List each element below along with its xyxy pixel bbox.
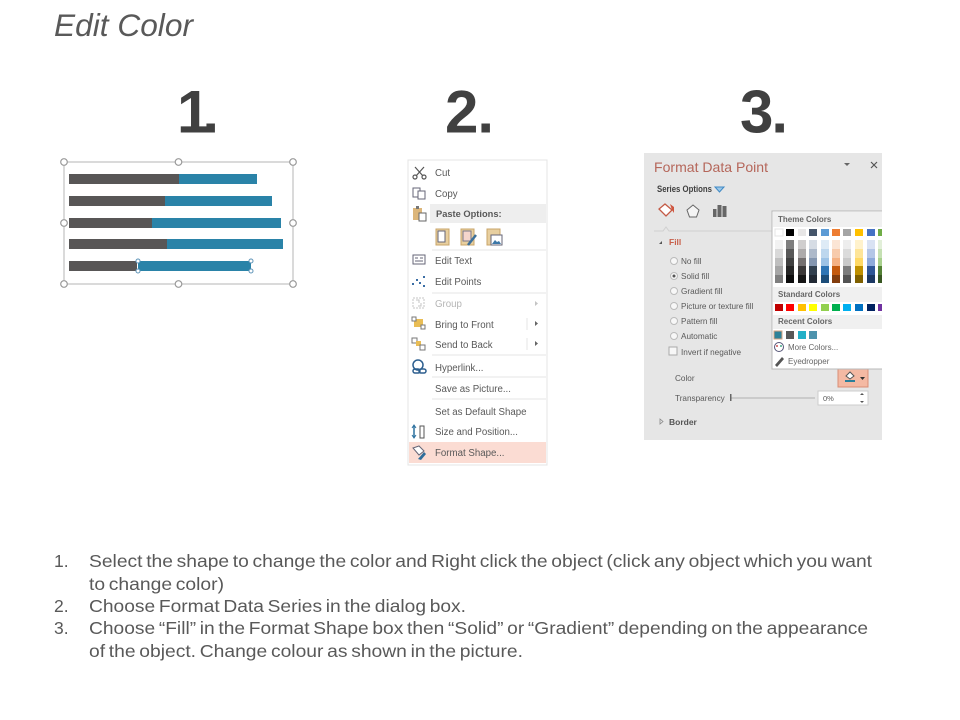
step 3 text xyxy=(54,618,868,661)
icon: series options arrow xyxy=(715,187,724,192)
fill radio options: Color xyxy=(675,374,695,383)
icon: paste xyxy=(413,206,426,221)
menu labels: Format Shape... xyxy=(435,448,504,459)
icon: send to back xyxy=(412,338,425,350)
transparency slider xyxy=(730,391,868,405)
panel: context menu xyxy=(408,160,547,465)
fill radio options: Pattern fill xyxy=(681,317,718,326)
menu labels: Copy xyxy=(435,189,458,200)
step number 3: 3. xyxy=(740,78,788,146)
menu labels: Size and Position... xyxy=(435,427,518,438)
step 2 text: 2. xyxy=(54,596,69,616)
menu labels: Edit Points xyxy=(435,277,481,288)
menu labels: Set as Default Shape xyxy=(435,407,527,418)
step 1 text xyxy=(54,551,872,594)
pane controls xyxy=(844,163,850,166)
step 1 text: Select the shape to change the color and Right click the object (click any object which you want xyxy=(89,551,872,571)
menu labels: Send to Back xyxy=(435,340,493,351)
standard color row xyxy=(775,304,882,311)
menu labels xyxy=(435,168,527,459)
step 1 text: to change color) xyxy=(89,574,224,594)
fill radio options xyxy=(669,257,754,403)
icon: pentagon xyxy=(687,205,699,217)
menu background xyxy=(408,160,547,465)
menu labels: Bring to Front xyxy=(435,320,494,331)
panel: format data point pane xyxy=(644,153,882,440)
icon: size and position xyxy=(412,425,424,438)
menu labels: Cut xyxy=(435,168,450,179)
step 3 text: of the object. Change colour as shown in the picture. xyxy=(89,641,523,661)
step 2 text: Choose Format Data Series in the dialog box. xyxy=(89,596,466,616)
menu labels: Paste Options: xyxy=(436,209,502,219)
popup headings xyxy=(778,215,841,326)
icon: scissors xyxy=(413,167,426,179)
menu labels: Hyperlink... xyxy=(435,363,483,374)
more colors option: More Colors... xyxy=(788,343,838,352)
selection frame xyxy=(64,162,293,284)
popup headings: Theme Colors xyxy=(778,215,832,224)
title: Edit Color xyxy=(54,7,195,43)
tab divider xyxy=(654,227,773,231)
eyedropper option: Eyedropper xyxy=(788,357,830,366)
fill radio options: No fill xyxy=(681,257,702,266)
theme color shades xyxy=(775,240,882,283)
gray bars xyxy=(69,174,179,271)
pane heading: Format Data Point xyxy=(654,159,768,175)
step 3 text: Choose “Fill” in the Format Shape box then “Solid” or “Gradient” depending on the appearance xyxy=(89,618,868,638)
popup headings: Standard Colors xyxy=(778,290,841,299)
icon: bring to front xyxy=(412,317,425,329)
pane background xyxy=(644,153,882,440)
icon: edit points xyxy=(412,276,425,287)
series options label: Series Options xyxy=(657,184,712,194)
step number 1: 1. xyxy=(177,78,219,146)
icon: edit text xyxy=(413,255,425,264)
menu separators xyxy=(432,250,546,399)
icon: copy xyxy=(413,188,425,199)
fill section header xyxy=(659,237,681,247)
fill radio options: Gradient fill xyxy=(681,287,723,296)
paste options highlight xyxy=(430,204,546,223)
border section: Border xyxy=(669,417,698,427)
fill section header: Fill xyxy=(669,237,681,247)
theme color row xyxy=(775,229,882,236)
step number 2: 2. xyxy=(445,78,494,146)
popup background xyxy=(772,211,882,369)
eyedropper option xyxy=(775,357,830,367)
icon: paste options xyxy=(436,229,502,245)
icon: format shape xyxy=(413,446,426,460)
panel: color picker popup xyxy=(772,211,882,369)
fill radio options: Transparency xyxy=(675,394,726,403)
panel: selected bar chart xyxy=(61,159,296,287)
icon: group xyxy=(413,298,424,308)
fill radio options: Invert if negative xyxy=(681,348,742,357)
fill radio options: Picture or texture fill xyxy=(681,302,754,311)
transparency slider: 0% xyxy=(823,394,834,403)
icon: fill bucket xyxy=(659,204,674,216)
data point handles xyxy=(136,259,253,273)
format shape highlight xyxy=(409,442,546,463)
popup headings: Recent Colors xyxy=(778,317,833,326)
step 3 text: 3. xyxy=(54,618,69,638)
menu labels: Edit Text xyxy=(435,256,472,267)
fill radio options: Solid fill xyxy=(681,272,709,281)
popup header bands xyxy=(773,212,882,227)
recent color row xyxy=(774,331,817,339)
instructions list xyxy=(54,551,872,661)
frame handles xyxy=(61,159,296,287)
step 1 text: 1. xyxy=(54,551,69,571)
menu labels: Group xyxy=(435,299,462,310)
icon: hyperlink xyxy=(413,360,426,373)
fill radio options: Automatic xyxy=(681,332,717,341)
blue bars xyxy=(138,174,283,271)
menu labels: Save as Picture... xyxy=(435,384,511,395)
color button xyxy=(838,368,868,387)
icon: columns xyxy=(713,205,726,217)
submenu arrows xyxy=(535,301,538,346)
